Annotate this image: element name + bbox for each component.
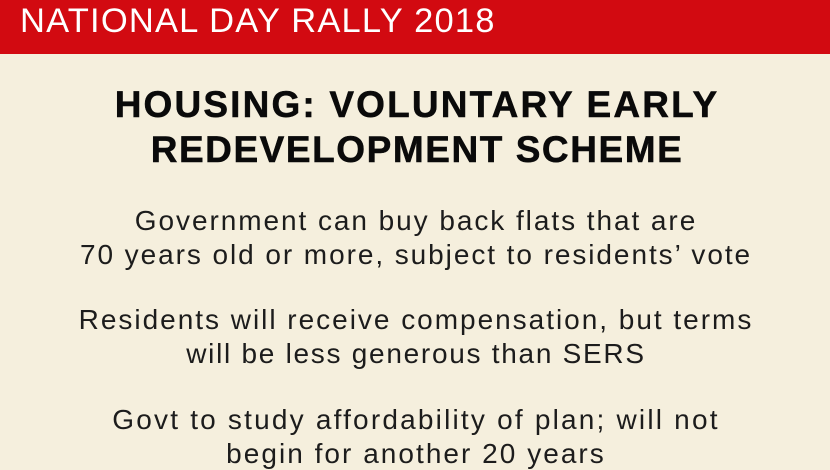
text block: buy back — [80, 205, 752, 270]
text block: affordability: begin for another 20 years — [226, 438, 606, 468]
banner title: NATIONAL DAY RALLY 2018 — [20, 2, 496, 40]
heading: HOUSING: VOLUNTARY EARLY — [115, 84, 719, 125]
text block: buy back: Government can buy back flats that are — [135, 205, 697, 236]
text block: affordability: Govt to study affordability of plan; will not — [112, 404, 720, 435]
text block: compensation — [79, 304, 753, 369]
text block: buy back: 70 years old or more, subject to residents’ vote — [80, 238, 752, 270]
heading — [115, 84, 719, 170]
text block: compensation: Residents will receive compensation, but terms — [79, 304, 753, 335]
header banner — [0, 0, 830, 54]
text block: compensation: will be less generous than SERS — [186, 338, 646, 368]
text block: affordability — [112, 404, 720, 469]
heading: REDEVELOPMENT SCHEME — [151, 129, 683, 170]
